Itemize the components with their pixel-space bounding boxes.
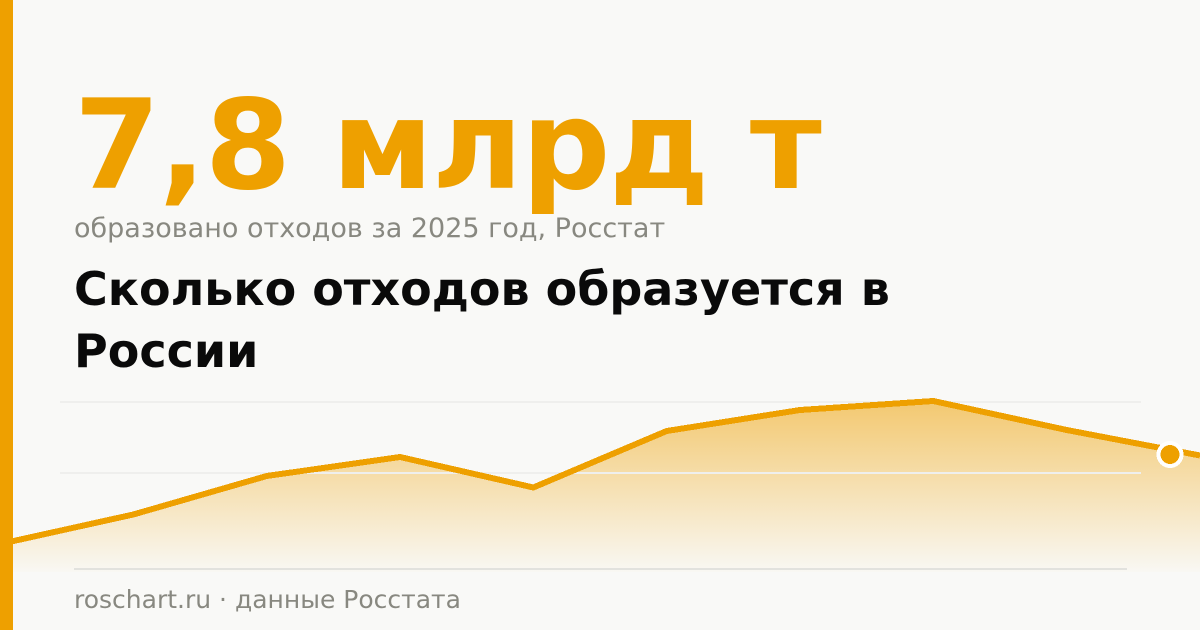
heading: Сколько отходов образуется в [74, 262, 890, 316]
headline value: 7,8 млрд т [74, 74, 821, 218]
footer source: roschart.ru · данные Росстата [74, 585, 461, 614]
heading [74, 262, 890, 378]
accent bar [0, 0, 13, 630]
footer divider [74, 568, 1127, 570]
subtitle: образовано отходов за 2025 год, Росстат [74, 213, 665, 244]
heading: России [74, 324, 258, 378]
